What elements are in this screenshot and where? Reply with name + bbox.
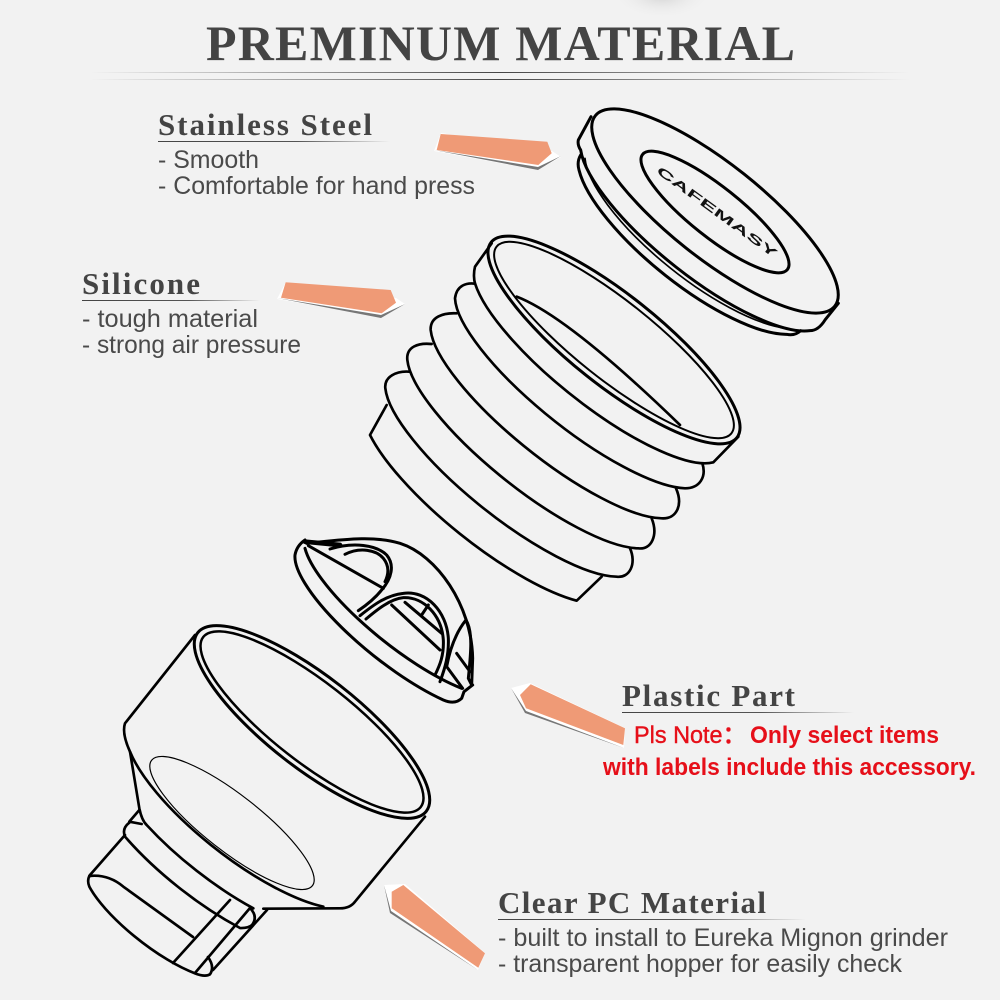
- arrow: clear PC material: [384, 884, 485, 970]
- panel: silicone label: [82, 266, 301, 359]
- text: stainless steel bullet 2: - Comfortable for hand press: [158, 172, 475, 200]
- text: silicone bullet 2: - strong air pressure: [82, 331, 301, 359]
- part: stainless steel lid: [566, 79, 864, 343]
- text: stainless steel bullet 1: - Smooth: [158, 146, 259, 174]
- part: silicone bellows: [370, 207, 765, 601]
- text: red note prefix: Pls Note：: [634, 722, 746, 749]
- heading: stainless steel: Stainless Steel: [158, 107, 372, 142]
- heading: silicone: Silicone: [82, 266, 200, 301]
- heading: plastic part: Plastic Part: [622, 678, 796, 713]
- arrow: stainless steel: [434, 133, 561, 170]
- heading: clear PC material: Clear PC Material: [498, 885, 766, 920]
- text: clear PC bullet 2: - transparent hopper for easily check: [498, 950, 902, 978]
- part: clear PC hopper base: [88, 596, 455, 976]
- arrow: silicone: [277, 282, 405, 318]
- title: PREMINUM MATERIAL: [206, 15, 795, 71]
- panel: plastic part label: [602, 678, 976, 781]
- text: clear PC bullet 1: - built to install to Eureka Mignon grinder: [498, 924, 948, 952]
- panel: stainless steel label: [158, 107, 475, 200]
- arrow: plastic part: [511, 683, 625, 748]
- text: CAFEMASY logo: CAFEMASY: [654, 163, 780, 261]
- part: plastic dome insert: [295, 539, 473, 702]
- text: red note line 1: Only select items: [750, 722, 939, 749]
- text: red note line 2: with labels include this accessory.: [602, 754, 976, 781]
- text: silicone bullet 1: - tough material: [82, 305, 258, 333]
- panel: clear PC material label: [498, 885, 948, 978]
